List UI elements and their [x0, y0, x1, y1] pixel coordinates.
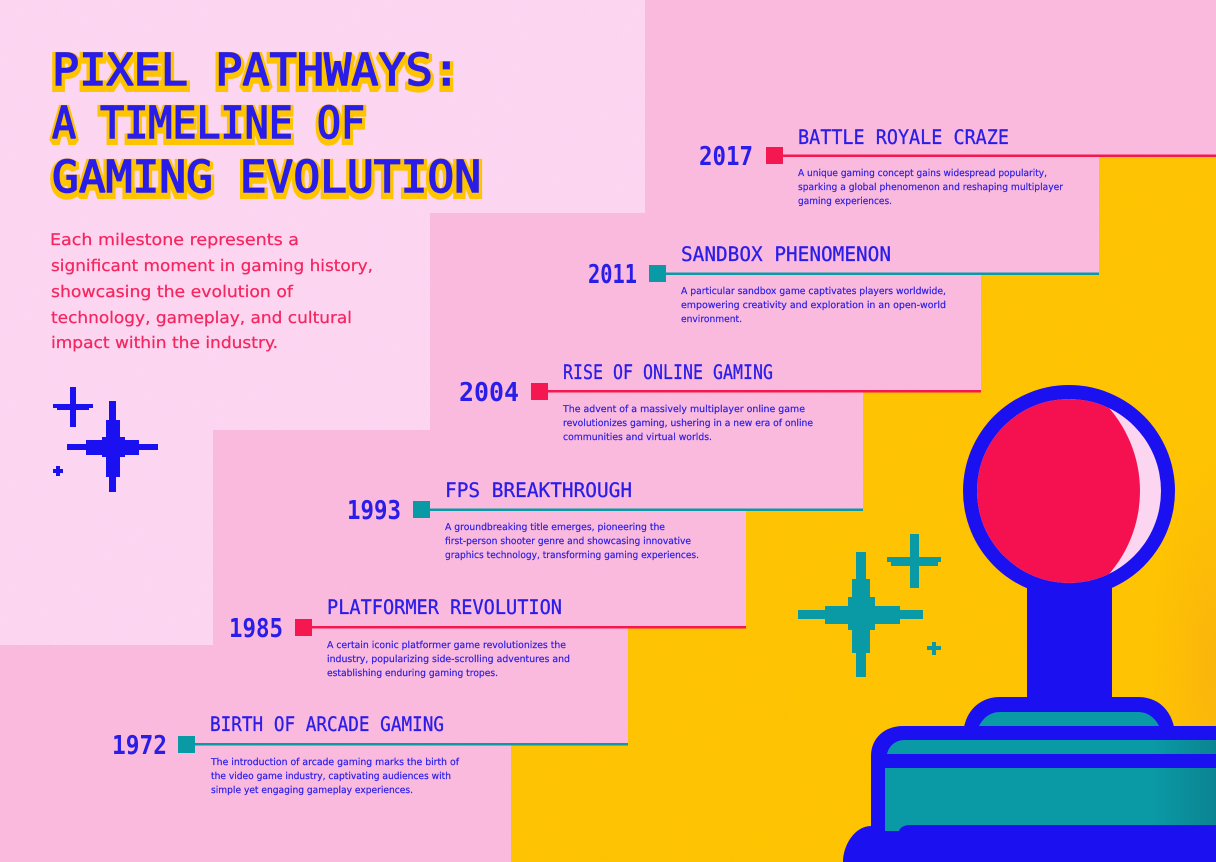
title [52, 45, 481, 206]
milestone 1972 [112, 712, 628, 796]
description: revolutionizes gaming, ushering in a new era of online [563, 418, 813, 429]
marker [649, 265, 666, 282]
description: the video game industry, captivating audiences with [211, 771, 451, 782]
description [210, 757, 460, 796]
description [562, 404, 813, 443]
console top teal band [887, 740, 1216, 754]
connector line [430, 508, 863, 511]
background: orange burn at right edge [1000, 160, 1216, 862]
intro text block: Each milestone represents a [50, 230, 299, 249]
console front teal panel [885, 768, 1216, 831]
intro text block: significant moment in gaming history, [51, 256, 373, 275]
marker [413, 501, 430, 518]
description: establishing enduring gaming tropes. [327, 668, 498, 679]
icon: arcade joystick [843, 385, 1216, 862]
staircase: pale pink title panel [0, 0, 645, 645]
joystick stem [1027, 580, 1112, 710]
marker [766, 147, 783, 164]
connector line [666, 272, 1099, 275]
description: empowering creativity and exploration in an open-world [681, 300, 946, 311]
description: first-person shooter genre and showcasing innovative [445, 536, 691, 547]
year: 2017 [699, 142, 753, 172]
joystick ball ring [963, 385, 1175, 597]
year: 1993 [347, 496, 401, 526]
red ball [977, 399, 1140, 583]
milestone 2017 [699, 125, 1216, 207]
marker [531, 383, 548, 400]
connector line [312, 626, 746, 628]
console bottom plinth [843, 825, 1216, 862]
intro text block: impact within the industry. [51, 333, 278, 352]
title lettering: PIXEL PATHWAYS: [52, 45, 460, 96]
connector line [783, 154, 1216, 157]
description: communities and virtual worlds. [563, 432, 712, 443]
heading: SANDBOX PHENOMENON [681, 242, 891, 266]
description: A certain iconic platformer game revolutionizes the [327, 640, 566, 651]
description [681, 286, 946, 325]
milestone 2004 [459, 360, 981, 443]
description [445, 522, 699, 561]
description [327, 640, 570, 679]
heading: RISE OF ONLINE GAMING [563, 360, 773, 384]
ball highlight [977, 399, 1161, 583]
milestone 1993 [347, 478, 863, 561]
year: 1985 [229, 614, 283, 644]
title shadow [52, 48, 481, 206]
description: gaming experiences. [798, 196, 892, 207]
marker [295, 619, 312, 636]
description: A groundbreaking title emerges, pioneering the [445, 522, 665, 533]
milestone 2011 [588, 242, 1099, 325]
description: A unique gaming concept gains widespread popularity, [798, 168, 1047, 179]
intro text block: technology, gameplay, and cultural [51, 308, 352, 327]
description: simple yet engaging gameplay experiences. [211, 785, 413, 796]
upper collar [964, 697, 1174, 727]
intro text block: showcasing the evolution of [51, 282, 293, 301]
title lettering [52, 45, 481, 203]
connector line [548, 390, 981, 392]
heading: BATTLE ROYALE CRAZE [798, 125, 1009, 149]
icon: blue sparkles [53, 387, 158, 492]
title shadow: A TIMELINE OF [52, 101, 365, 152]
description: A particular sandbox game captivates players worldwide, [681, 286, 946, 297]
heading: PLATFORMER REVOLUTION [327, 595, 562, 619]
connector line [195, 743, 628, 746]
heading: BIRTH OF ARCADE GAMING [210, 712, 444, 736]
heading: FPS BREAKTHROUGH [445, 478, 632, 502]
icon: teal sparkles [798, 534, 941, 677]
description: The introduction of arcade gaming marks the birth of [210, 757, 460, 768]
description: environment. [681, 314, 742, 325]
marker [178, 736, 195, 753]
console body outline [871, 726, 1216, 862]
description [798, 168, 1063, 207]
year: 2011 [588, 260, 637, 290]
upper collar teal inset [979, 712, 1159, 726]
description: graphics technology, transforming gaming experiences. [445, 550, 699, 561]
intro text block [50, 230, 373, 352]
title lettering: GAMING EVOLUTION [52, 152, 481, 203]
title shadow: PIXEL PATHWAYS: [52, 48, 460, 99]
year: 1972 [112, 731, 167, 761]
title lettering: A TIMELINE OF [52, 98, 365, 149]
title shadow: GAMING EVOLUTION [52, 155, 481, 206]
description: The advent of a massively multiplayer online game [562, 404, 805, 415]
milestone 1985 [229, 595, 746, 679]
description: sparking a global phenomenon and reshaping multiplayer [798, 182, 1063, 193]
description: industry, popularizing side-scrolling adventures and [327, 654, 570, 665]
year: 2004 [459, 378, 519, 408]
